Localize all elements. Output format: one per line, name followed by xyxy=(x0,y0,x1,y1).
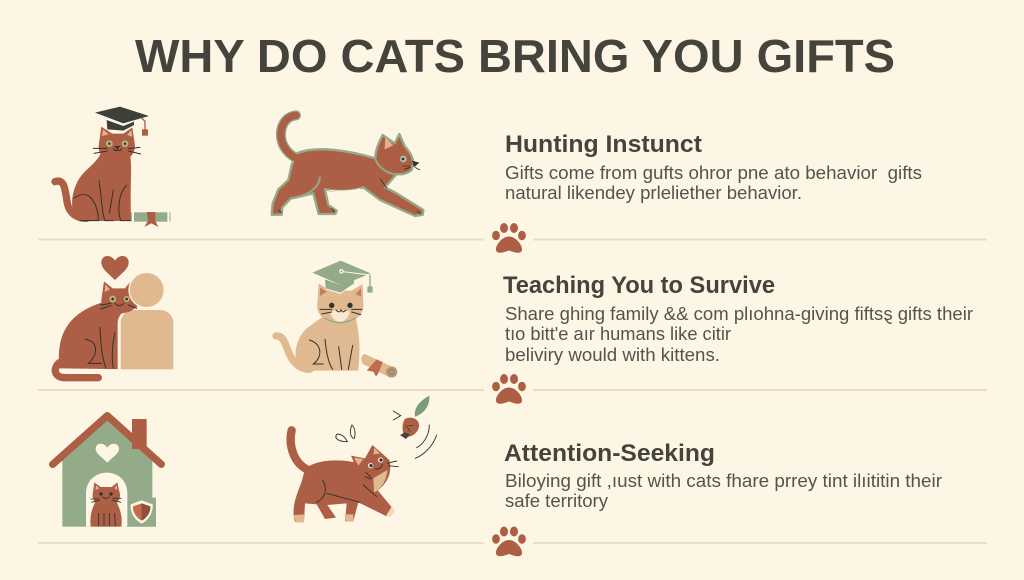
section: teaching you to survive text: Share ghing family && com plıohna-giving fiftsȿ gifts their xyxy=(505,304,973,324)
icon: paw 1 xyxy=(492,223,526,253)
icon: playful cat chasing carrot xyxy=(291,396,437,522)
icon: green house with cat and shield xyxy=(53,416,161,527)
icon: paw 2 xyxy=(492,374,526,404)
icon: cat nuzzling person with heart xyxy=(55,256,173,378)
section: teaching you to survive text: Teaching You to Survive xyxy=(503,272,775,299)
section: teaching you to survive text: beliviry would with kittens. xyxy=(505,345,720,365)
section: attention-seeking text: Attention-Seeking xyxy=(504,440,715,467)
icon: graduate cat with diploma xyxy=(55,107,171,227)
section: hunting instinct text: Gifts come from gufts ohror pne ato behavior gifts xyxy=(505,163,922,183)
section: attention-seeking text xyxy=(504,440,942,511)
section: attention-seeking text: Biloying gift ,ıust with cats fhare prrey tint ilıititin their xyxy=(505,471,942,491)
icon: tan graduate kitten with scroll xyxy=(276,261,397,378)
title: WHY DO CATS BRING YOU GIFTS xyxy=(135,30,895,82)
icon: walking cat xyxy=(272,115,423,216)
section: hunting instinct text: natural likendey prleliether behavior. xyxy=(505,183,802,203)
icon: paw 3 xyxy=(492,526,526,556)
section: hunting instinct text: Hunting Instunct xyxy=(505,131,702,158)
section: hunting instinct text xyxy=(505,131,922,203)
section: teaching you to survive text xyxy=(503,272,973,365)
section: attention-seeking text: safe territory xyxy=(505,491,608,511)
section: teaching you to survive text: tıo bitt'e aır humans like citir xyxy=(505,324,731,344)
